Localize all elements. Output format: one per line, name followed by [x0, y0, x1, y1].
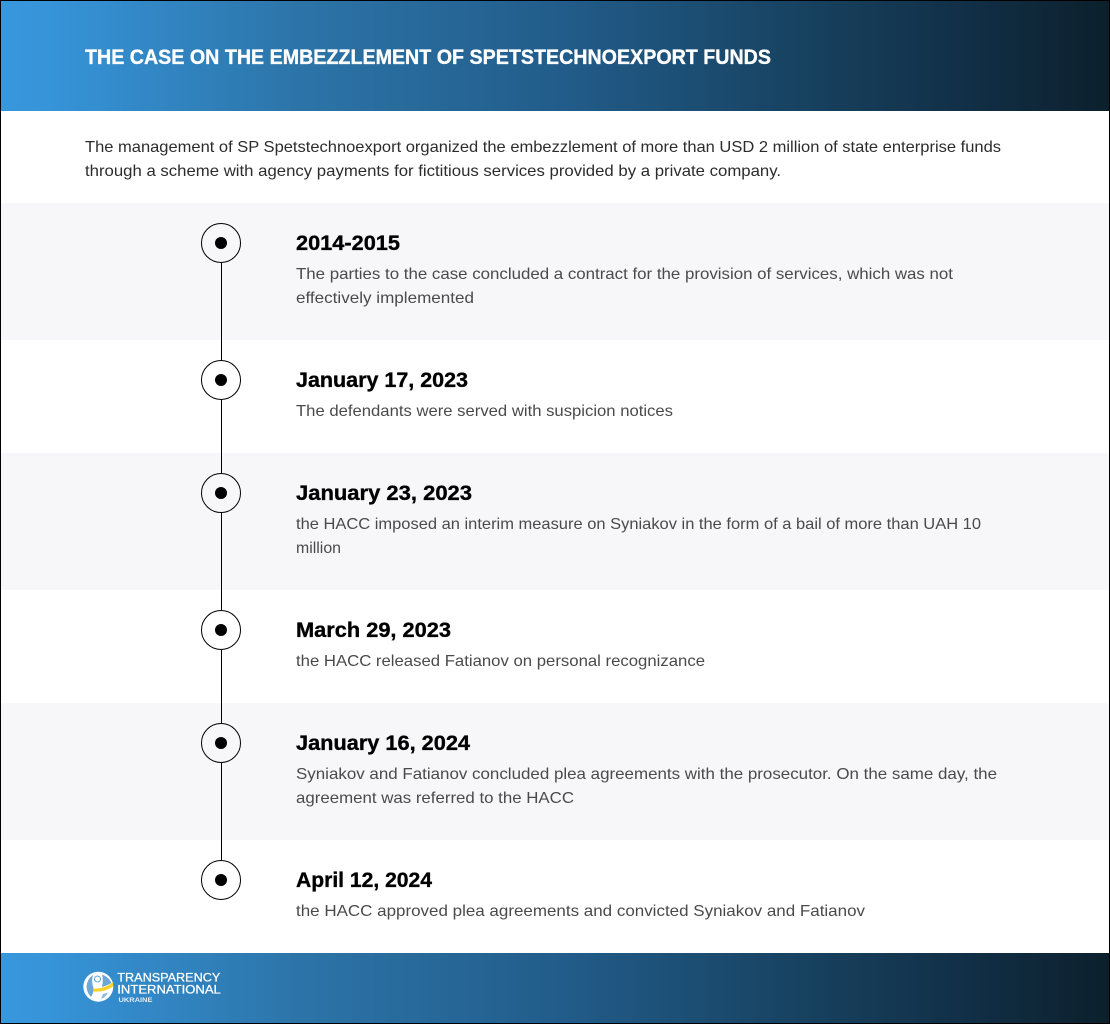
footer banner [1, 953, 1109, 1023]
event: January 16, 2024: January 16, 2024 [296, 732, 470, 755]
event: January 17, 2023 [296, 369, 673, 420]
timeline marker: March 29, 2023 [202, 610, 240, 650]
panel: January 16, 2024 background [1, 703, 1109, 840]
event: January 16, 2024: Syniakov and Fatianov concluded plea agreements with the prosecutor. On the same day, the [296, 766, 997, 783]
timeline marker: 2014-2015 [202, 224, 240, 262]
event: April 12, 2024 [296, 869, 865, 920]
event: January 23, 2023: the HACC imposed an interim measure on Syniakov in the form of a bail of more than UAH 10 [296, 516, 981, 533]
timeline line [220, 262, 222, 861]
event: April 12, 2024: the HACC approved plea agreements and convicted Syniakov and Fatianov [296, 903, 865, 920]
event: January 23, 2023: million [296, 540, 341, 557]
timeline marker: January 17, 2023 [202, 360, 240, 400]
title: THE CASE ON THE EMBEZZLEMENT OF SPETSTECHNOEXPORT FUNDS [85, 46, 771, 69]
logo text [117, 970, 221, 1004]
event: March 29, 2023: the HACC released Fatianov on personal recognizance [296, 653, 705, 670]
icon: globe with figure [83, 972, 113, 1002]
logo text: UKRAINE [118, 997, 153, 1004]
event: January 23, 2023 [296, 482, 981, 557]
event: 2014-2015: 2014-2015 [296, 232, 400, 255]
event: 2014-2015 [296, 232, 954, 307]
timeline marker: January 16, 2024 [202, 724, 240, 762]
panel: January 23, 2023 background [1, 453, 1109, 590]
event: January 17, 2023: January 17, 2023 [296, 369, 468, 392]
header banner [1, 1, 1109, 111]
event: 2014-2015: effectively implemented [296, 290, 474, 307]
panel: 2014-2015 background [1, 203, 1109, 340]
intro text [85, 139, 1001, 180]
logo: Transparency International Ukraine [83, 970, 221, 1004]
event: March 29, 2023: March 29, 2023 [296, 619, 451, 642]
event: March 29, 2023 [296, 619, 705, 670]
event: January 16, 2024: agreement was referred to the HACC [296, 790, 574, 807]
event: January 16, 2024 [296, 732, 997, 807]
event: January 17, 2023: The defendants were served with suspicion notices [296, 403, 673, 420]
intro text: through a scheme with agency payments for fictitious services provided by a private company. [85, 163, 781, 180]
event: April 12, 2024: April 12, 2024 [296, 869, 432, 892]
timeline marker: January 23, 2023 [202, 474, 240, 512]
timeline marker: April 12, 2024 [202, 860, 240, 900]
logo text: INTERNATIONAL [117, 982, 221, 996]
logo text: TRANSPARENCY [117, 970, 220, 984]
event: 2014-2015: The parties to the case concluded a contract for the provision of services, which was not [296, 266, 954, 283]
event: January 23, 2023: January 23, 2023 [296, 482, 472, 505]
intro text: The management of SP Spetstechnoexport organized the embezzlement of more than USD 2 million of state enterprise funds [85, 139, 1001, 156]
